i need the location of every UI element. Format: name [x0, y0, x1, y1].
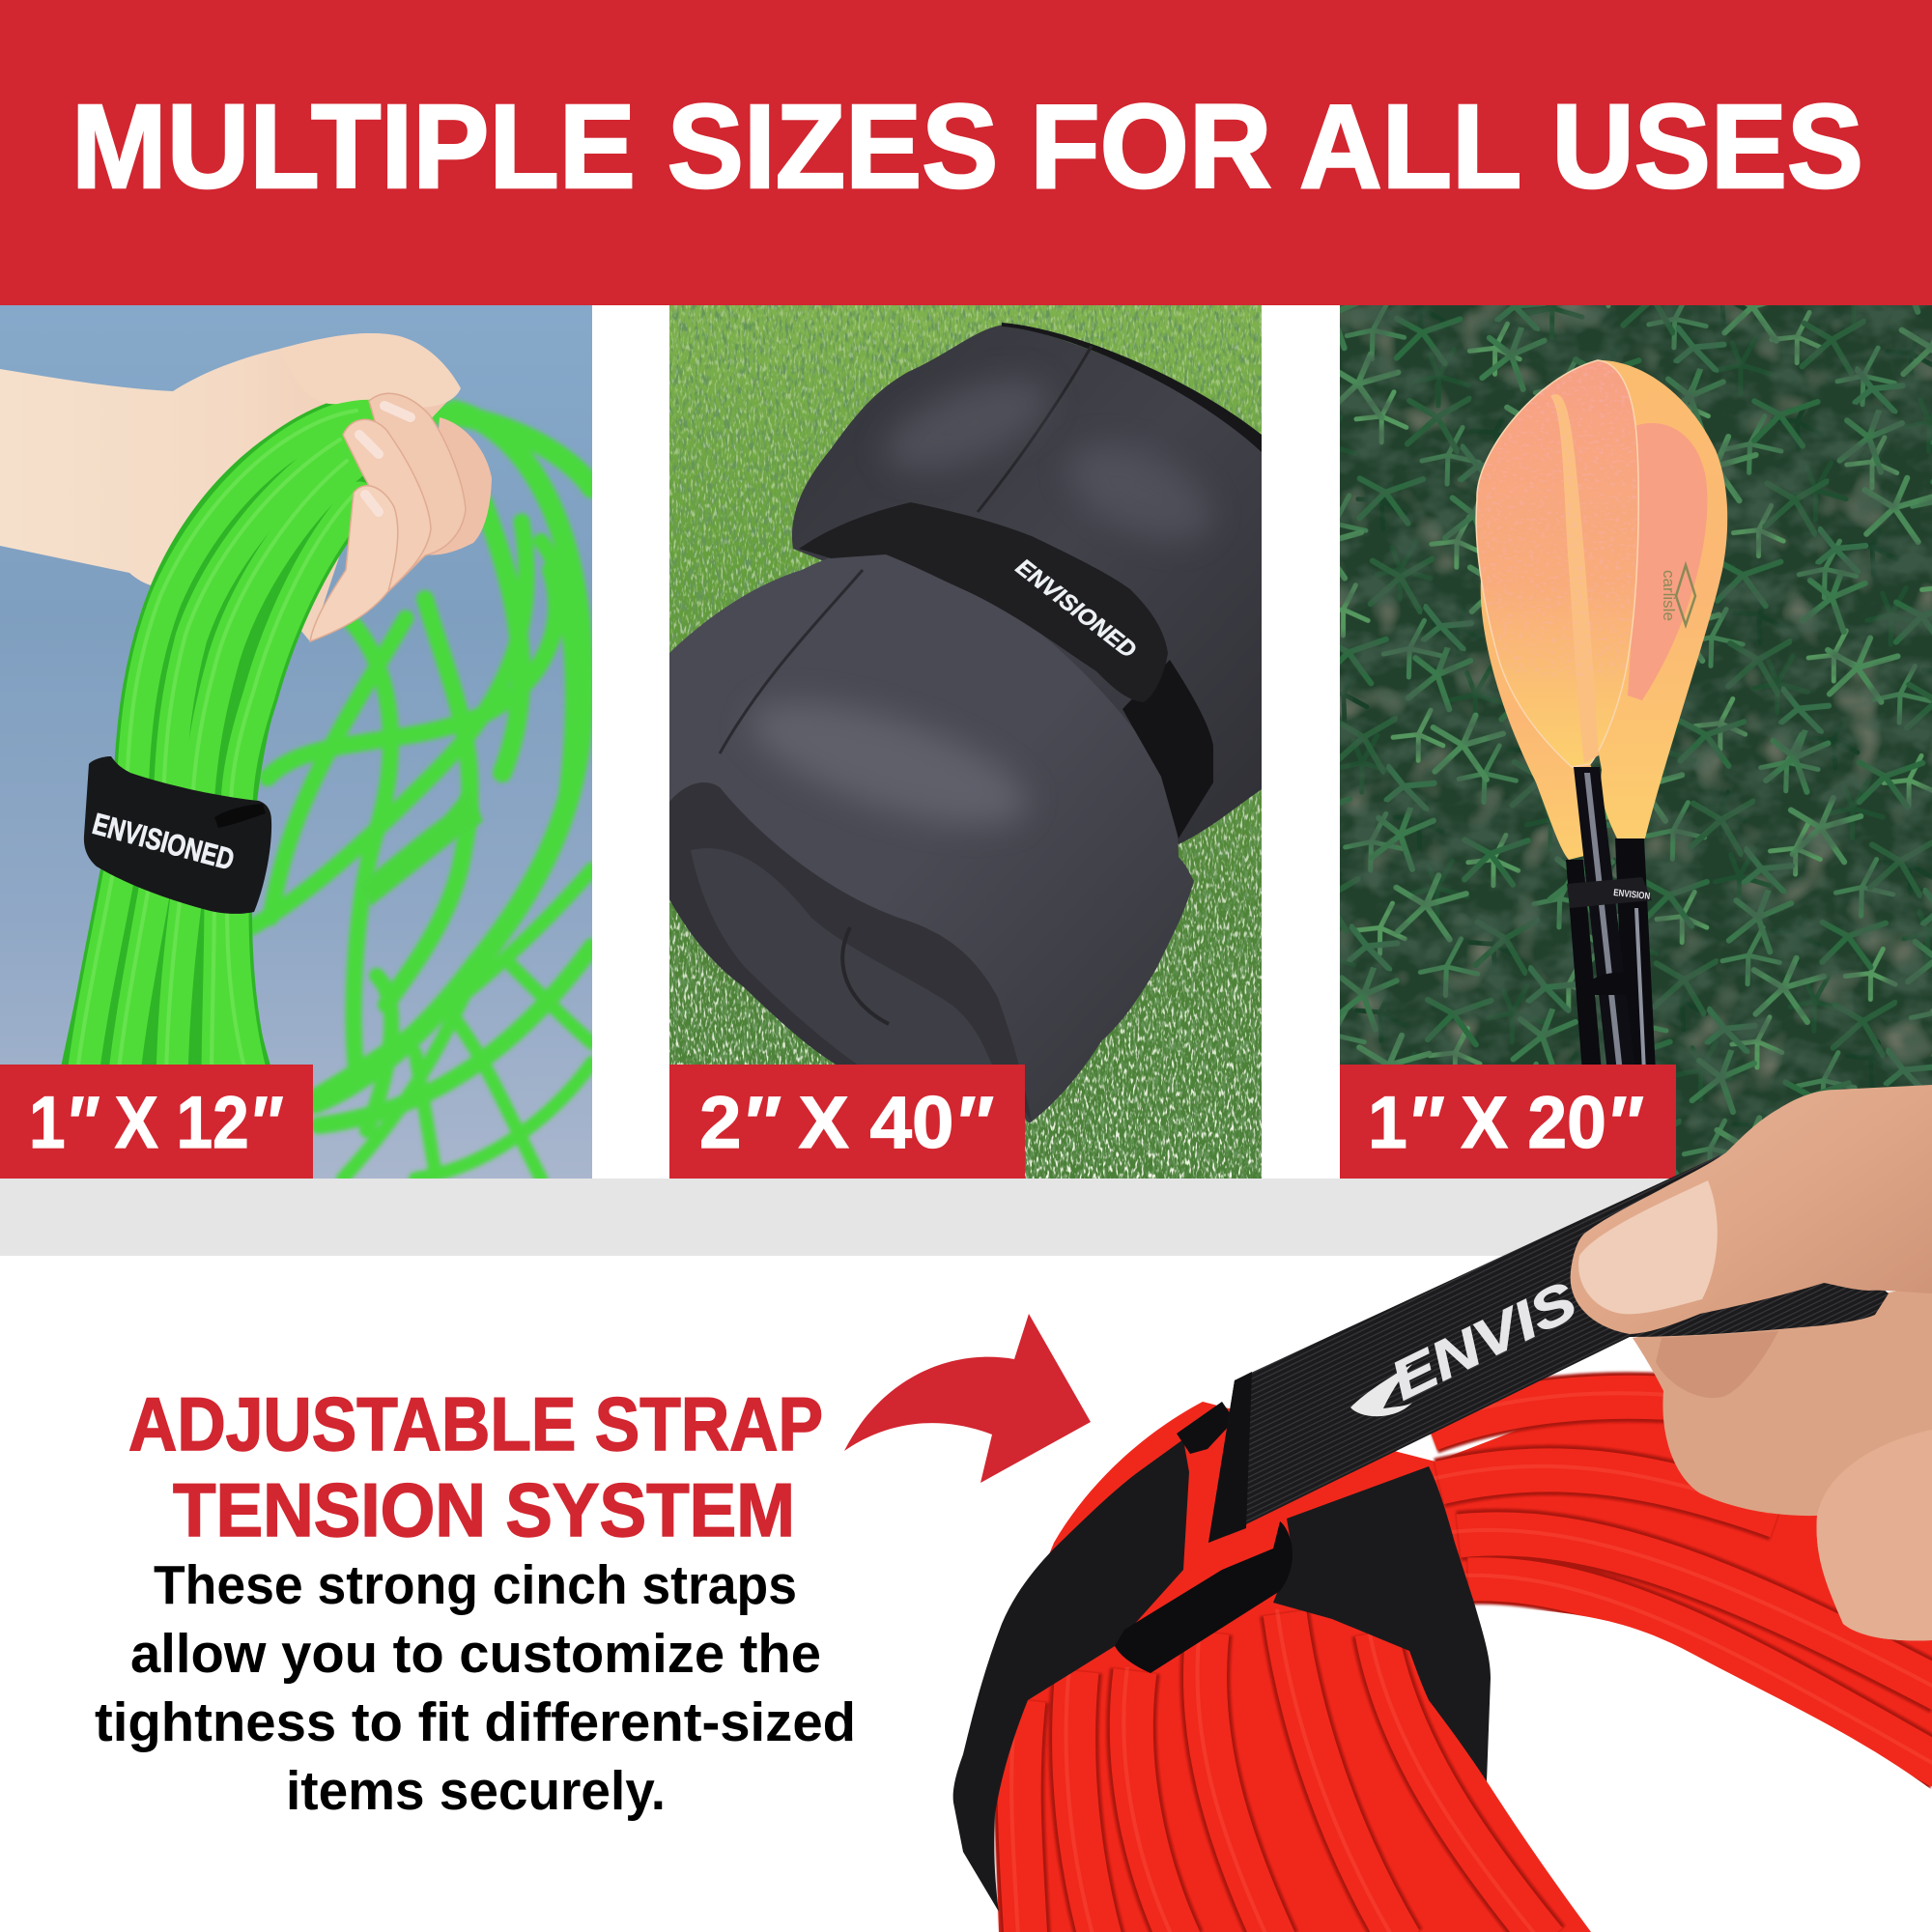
title: MULTIPLE SIZES FOR ALL USES	[71, 81, 1863, 213]
right velcro band	[1273, 1466, 1491, 1781]
foliage texture	[1340, 305, 1932, 1179]
upper thumb	[280, 333, 461, 408]
left velcro band	[953, 1439, 1189, 1912]
body text: items securely.	[286, 1760, 666, 1822]
thumb	[1571, 1085, 1932, 1334]
ring finger	[369, 393, 466, 591]
size label: 1 x 12: 1″ X 12″	[29, 1082, 283, 1164]
strap with logo	[1208, 1155, 1889, 1543]
strap logo text: ENVISIONED	[1010, 554, 1141, 664]
body text: These strong cinch straps	[154, 1554, 797, 1616]
strap logo swoosh	[1350, 1364, 1412, 1416]
nails	[359, 406, 411, 512]
arrow	[844, 1314, 1091, 1483]
front blade	[1476, 360, 1638, 767]
upper roll of bag	[792, 323, 1262, 844]
body text: tightness to fit different-sized	[95, 1691, 856, 1753]
back blade	[1481, 580, 1594, 860]
strap logo text: ENVISIONED	[89, 807, 238, 877]
lower roll of bag	[669, 552, 1194, 1122]
paddle brand mark	[1660, 565, 1695, 625]
paddle brand mark: carlisle	[1660, 570, 1678, 621]
white under bundle curve mask	[1491, 1607, 1932, 1932]
size label: 1 x 20	[1340, 1065, 1676, 1179]
strap logo text: ENVIS	[1381, 1269, 1586, 1411]
bag strap with logo	[799, 502, 1213, 838]
panel: sleeping bag photo	[669, 305, 1262, 1179]
thumbnail	[1578, 1180, 1718, 1314]
heading: adjustable strap: TENSION SYSTEM	[173, 1467, 795, 1552]
heading: adjustable strap: ADJUSTABLE STRAP	[128, 1381, 823, 1466]
pink speckle on blades	[1468, 357, 1739, 676]
heading: adjustable strap	[128, 1381, 823, 1552]
red cord bundle	[995, 1375, 1932, 1932]
panel: paddle photo	[1340, 305, 1932, 1179]
blurred plug	[367, 792, 485, 910]
size label: 1 x 12	[0, 1065, 313, 1179]
paddle shafts	[1566, 767, 1656, 1072]
cord bundle	[60, 398, 367, 1082]
strap with logo	[84, 756, 271, 914]
buckle	[1115, 1402, 1293, 1673]
paddle shafts: ENVISION	[1613, 888, 1651, 902]
body text: allow you to customize the	[130, 1623, 821, 1685]
right blade	[1584, 360, 1727, 838]
pinky	[425, 417, 492, 554]
lower fingers	[1633, 1285, 1932, 1640]
photo: red cord with strap and hand	[953, 1085, 1932, 1932]
gray band	[0, 1179, 1932, 1256]
size label: 2 x 40	[669, 1065, 1025, 1179]
grass texture	[669, 305, 1262, 1179]
fingers over the cords	[280, 333, 492, 641]
small strap	[1567, 877, 1652, 908]
size label: 2 x 40: 2″ X 40″	[699, 1082, 994, 1164]
body text	[95, 1554, 856, 1822]
index finger	[310, 486, 398, 641]
header banner	[0, 0, 1932, 305]
arm and palm behind cords	[0, 333, 460, 641]
size label: 1 x 20: 1″ X 20″	[1368, 1082, 1643, 1164]
middle finger	[343, 419, 431, 618]
blurred background cord loops	[251, 411, 592, 1179]
panel: green cord photo	[0, 305, 592, 1179]
